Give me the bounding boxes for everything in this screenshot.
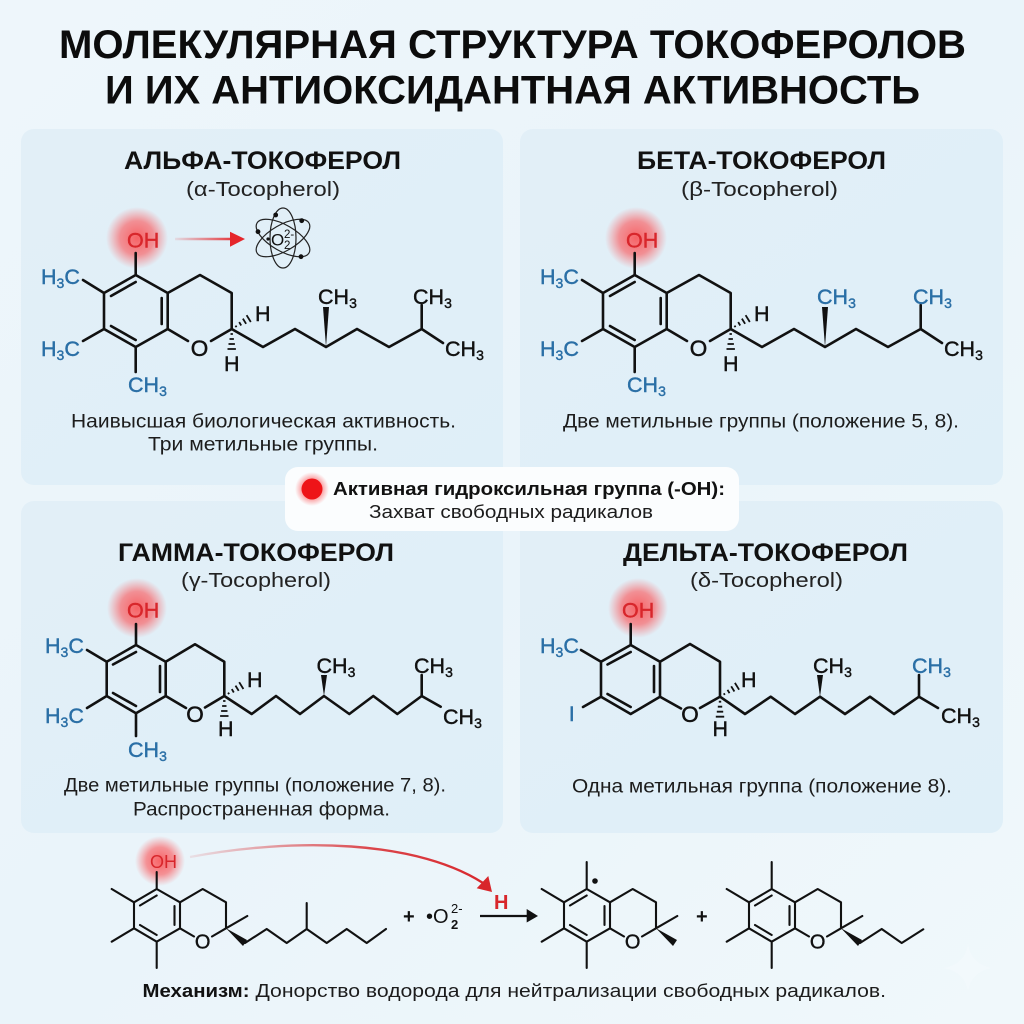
- reaction plus and radical: •O: [426, 906, 449, 928]
- caption: mechanism: Донорство водорода для нейтрализации свободных радикалов.: [256, 981, 886, 1001]
- molecule: beta: [540, 228, 983, 399]
- panel: delta-tocopherol: [520, 501, 1003, 833]
- arrow: reaction: [480, 909, 538, 922]
- molecule: beta: 3: [975, 347, 983, 363]
- molecule: delta: I: [569, 702, 575, 726]
- molecule: alpha: OH: [127, 228, 159, 252]
- molecule: alpha: 3: [444, 295, 452, 311]
- label: hydrogen: H: [494, 892, 508, 914]
- molecule: alpha: 3: [159, 383, 167, 399]
- molecule: beta: 3: [944, 295, 952, 311]
- molecule: alpha: C: [64, 337, 80, 361]
- molecule: beta: 3: [556, 275, 564, 291]
- molecule: gamma: OH: [127, 598, 159, 622]
- molecule: delta: O: [681, 702, 699, 727]
- icon: superoxide radical atom: 2-: [284, 229, 294, 241]
- molecule: delta: H: [741, 668, 757, 692]
- molecule: delta: H: [540, 634, 556, 658]
- molecule: gamma: CH: [443, 705, 474, 729]
- mechanism: reaction scheme: [112, 836, 923, 1001]
- callout text: Захват свободных радикалов: [369, 502, 653, 522]
- molecule: alpha: H: [224, 352, 240, 376]
- molecule: beta: CH: [627, 373, 658, 397]
- molecule: product: O: [810, 932, 825, 954]
- molecule: gamma: 3: [61, 644, 69, 660]
- molecule: delta: OH: [622, 598, 654, 622]
- molecule: alpha: H: [41, 337, 57, 361]
- heading: alpha: АЛЬФА-ТОКОФЕРОЛ: [124, 147, 401, 175]
- molecule: delta: CH: [941, 704, 972, 728]
- caption: mechanism: Механизм:: [142, 981, 250, 1001]
- molecule: reactant tocopherol: OH: [150, 852, 177, 872]
- icon: OH glow alpha: [106, 207, 168, 269]
- molecule: beta: O: [690, 336, 707, 361]
- callout text: [333, 479, 725, 522]
- description: gamma: Две метильные группы (положение 7, 8).: [64, 776, 446, 796]
- description: alpha: Наивысшая биологическая активность.: [71, 412, 456, 432]
- arrow: hydrogen transfer curve: [190, 845, 492, 892]
- molecule: beta: CH: [817, 285, 848, 309]
- molecule: beta: 3: [556, 347, 564, 363]
- icon: superoxide radical atom: 2: [284, 240, 290, 252]
- molecule: product: [727, 862, 923, 968]
- molecule: alpha: [41, 228, 484, 399]
- subtitle: beta: (β-Tocopherol): [681, 179, 838, 201]
- reaction plus and radical: 2: [451, 917, 458, 932]
- molecule: beta: CH: [944, 337, 975, 361]
- callout text: Активная гидроксильная группа (-OH):: [333, 479, 725, 499]
- panel: beta-tocopherol: [520, 129, 1003, 485]
- molecule: gamma: 3: [61, 714, 69, 730]
- molecule: beta: 3: [658, 383, 666, 399]
- molecule: gamma: CH: [316, 654, 348, 678]
- molecule: alpha: H: [255, 302, 271, 326]
- molecule: alpha: 3: [57, 275, 65, 291]
- description: alpha: Три метильные группы.: [148, 434, 378, 456]
- molecule: beta: C: [563, 337, 579, 361]
- arrow: OH to radical: [175, 232, 245, 247]
- molecule: reactant tocopherol: [112, 852, 386, 968]
- molecule: alpha: C: [64, 265, 80, 289]
- molecule: tocopheroxyl radical: O: [625, 932, 640, 954]
- molecule: delta: CH: [912, 654, 943, 678]
- molecule: alpha: CH: [128, 373, 159, 397]
- subtitle: alpha: (α-Tocopherol): [186, 179, 340, 201]
- molecule: delta: H: [712, 717, 728, 741]
- reaction plus and radical: [403, 901, 463, 932]
- heading: gamma: ГАММА-ТОКОФЕРОЛ: [118, 539, 394, 567]
- molecule: delta: CH: [813, 654, 844, 678]
- description: gamma: [64, 776, 446, 820]
- molecule: delta: C: [563, 634, 579, 658]
- icon: OH glow gamma: [107, 578, 167, 638]
- molecule: beta: C: [563, 265, 579, 289]
- callout: active hydroxyl group: [285, 467, 739, 531]
- molecule: beta: H: [540, 337, 556, 361]
- icon: red dot: [295, 472, 329, 506]
- molecule: alpha: O: [191, 336, 208, 361]
- description: delta: Одна метильная группа (положение 8).: [572, 776, 952, 798]
- molecule: gamma: H: [247, 668, 263, 692]
- molecule: delta: [540, 598, 980, 741]
- description: gamma: Распространенная форма.: [133, 800, 390, 820]
- molecule: alpha: CH: [318, 285, 349, 309]
- molecule: gamma: 3: [445, 664, 453, 680]
- icon: OH glow mechanism: [135, 836, 185, 886]
- panel: gamma-tocopherol: [21, 501, 503, 833]
- molecule: delta: 3: [943, 664, 951, 680]
- title: [59, 23, 966, 112]
- molecule: gamma: [45, 598, 482, 764]
- molecule: gamma: CH: [128, 738, 159, 762]
- molecule: gamma: 3: [159, 748, 167, 764]
- description: alpha: [71, 412, 456, 456]
- molecule: beta: H: [723, 352, 739, 376]
- molecule: beta: OH: [626, 228, 658, 252]
- molecule: alpha: CH: [413, 285, 444, 309]
- molecule: reactant tocopherol: O: [195, 932, 210, 954]
- description: beta: Две метильные группы (положение 5, 8).: [563, 412, 959, 432]
- reaction plus and radical: 2-: [451, 901, 463, 916]
- molecule: gamma: C: [68, 634, 84, 658]
- icon: superoxide radical atom: [251, 208, 315, 268]
- molecule: alpha: CH: [445, 337, 476, 361]
- heading: beta: БЕТА-ТОКОФЕРОЛ: [637, 147, 886, 175]
- molecule: beta: 3: [848, 295, 856, 311]
- title: МОЛЕКУЛЯРНАЯ СТРУКТУРА ТОКОФЕРОЛОВ: [59, 23, 966, 67]
- icon: superoxide radical atom: O: [271, 230, 284, 250]
- panel: alpha-tocopherol: [21, 129, 503, 485]
- molecule: beta: H: [540, 265, 556, 289]
- icon: OH glow beta: [605, 207, 667, 269]
- molecule: beta: CH: [913, 285, 944, 309]
- molecule: alpha: 3: [57, 347, 65, 363]
- molecule: alpha: 3: [349, 295, 357, 311]
- icon: faint sparkle: [944, 944, 992, 992]
- molecule: delta: 3: [556, 644, 564, 660]
- molecule: alpha: 3: [476, 347, 484, 363]
- title: И ИХ АНТИОКСИДАНТНАЯ АКТИВНОСТЬ: [105, 68, 920, 112]
- molecule: delta: 3: [972, 714, 980, 730]
- molecule: gamma: O: [186, 702, 204, 727]
- molecule: gamma: H: [45, 634, 61, 658]
- heading: delta: ДЕЛЬТА-ТОКОФЕРОЛ: [623, 539, 908, 567]
- molecule: gamma: 3: [474, 715, 482, 731]
- molecule: alpha: H: [41, 265, 57, 289]
- subtitle: delta: (δ-Tocopherol): [690, 570, 843, 592]
- reaction plus and radical: +: [403, 906, 415, 928]
- molecule: gamma: C: [68, 704, 84, 728]
- molecule: delta: 3: [844, 664, 852, 680]
- molecule: gamma: 3: [348, 664, 356, 680]
- molecule: beta: H: [754, 302, 770, 326]
- molecule: gamma: H: [218, 717, 234, 741]
- molecule: gamma: CH: [414, 654, 445, 678]
- plus sign: +: [696, 906, 708, 928]
- subtitle: gamma: (γ-Tocopherol): [181, 570, 331, 592]
- molecule: tocopheroxyl radical: [542, 862, 677, 968]
- icon: OH glow delta: [608, 578, 668, 638]
- molecule: gamma: H: [45, 704, 61, 728]
